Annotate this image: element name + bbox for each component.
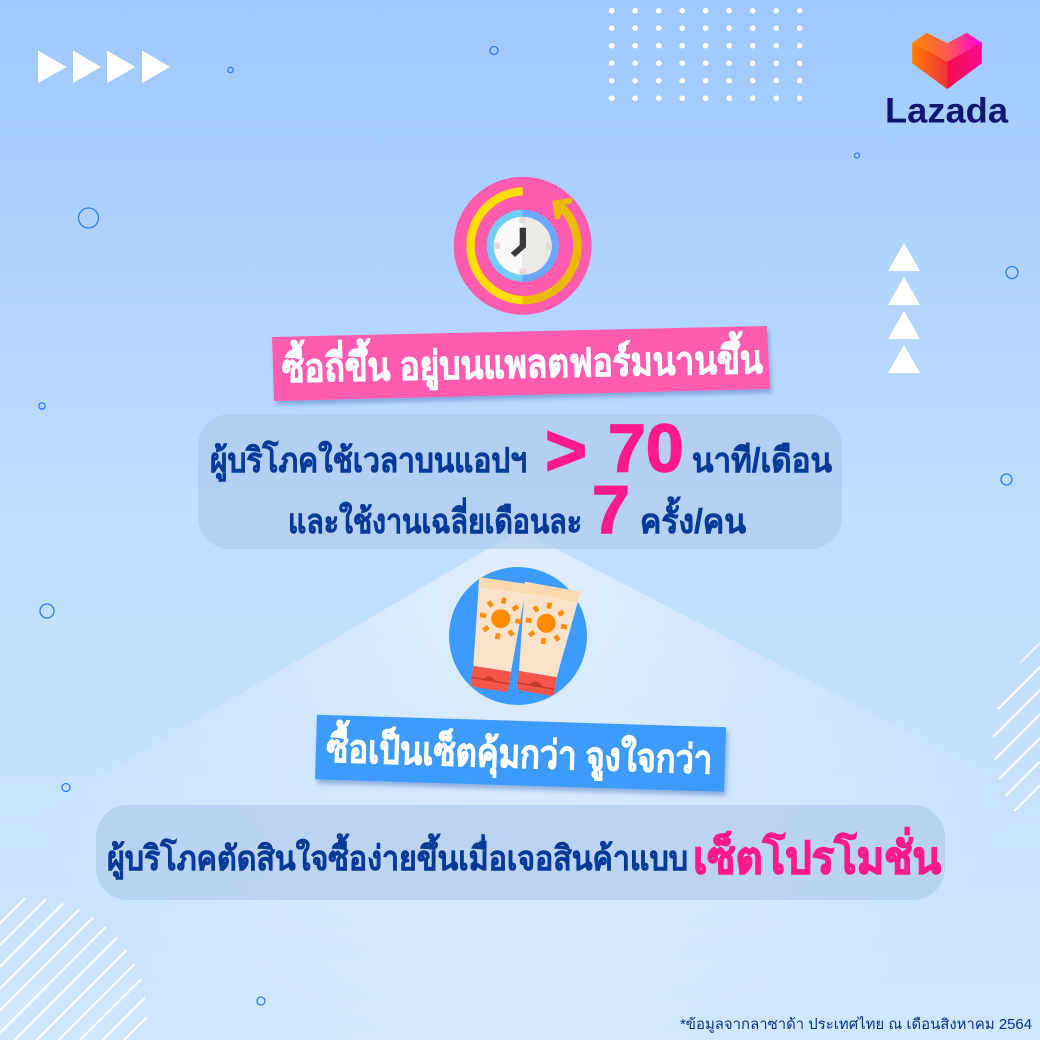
decoration: upward triangles: [888, 243, 920, 373]
icon: Lazada heart: [912, 33, 982, 89]
icon: clock with circular arrow: [454, 177, 592, 315]
text: minutes per month: นาที/เดือน: [692, 442, 832, 480]
panel: time on app: [198, 411, 842, 549]
banner: blue heading: ซื้อเป็นเซ็ตคุ้มกว่า จูงใจกว่า: [326, 720, 713, 784]
decoration: diagonal lines bottom left: [0, 898, 147, 1040]
stat: greater than: >: [545, 411, 587, 491]
text: decision statement: ผู้บริโภคตัดสินใจซื้อง่ายขึ้นเมื่อเจอสินค้าแบบ: [107, 833, 688, 880]
stat: 7: 7: [592, 472, 630, 548]
text: promo set highlight: เซ็ตโปรโมชั่น: [693, 827, 941, 883]
text: times per person: ครั้ง/คน: [640, 496, 746, 541]
wordmark: Lazada: [885, 92, 1009, 131]
stat: 70: 70: [608, 411, 684, 487]
decoration: dot grid: [609, 8, 802, 101]
panel: promotion set: [96, 805, 945, 900]
banner: pink heading: ซื้อถี่ขึ้น อยู่บนแพลตฟอร์มนานขึ้น: [281, 331, 763, 393]
text: line two label: และใช้งานเฉลี่ยเดือนละ: [288, 497, 582, 541]
decoration: right-pointing triangles: [38, 50, 170, 83]
logo: Lazada: [885, 33, 1009, 131]
banner: pink heading: [272, 326, 770, 401]
banner: blue heading: [315, 715, 726, 792]
icon: sunscreen tubes: [449, 567, 587, 705]
footnote: *ข้อมูลจากลาซาด้า ประเทศไทย ณ เดือนสิงหาคม 2564: [680, 1015, 1032, 1033]
decoration: diagonal lines right: [993, 643, 1040, 811]
text: line one label: ผู้บริโภคใช้เวลาบนแอปฯ: [210, 440, 527, 482]
